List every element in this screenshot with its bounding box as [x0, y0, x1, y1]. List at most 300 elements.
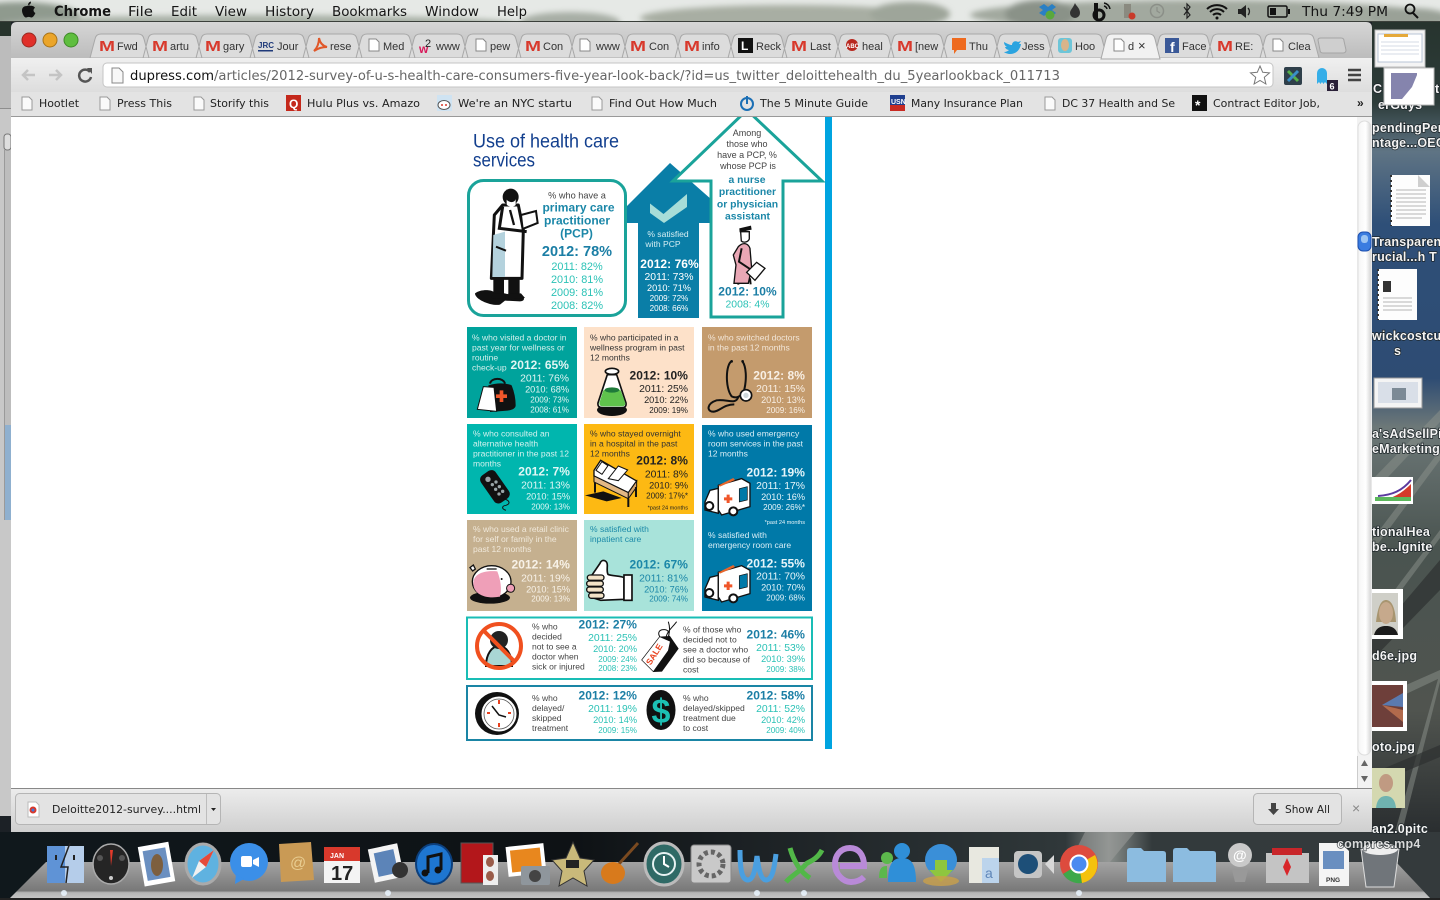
dock icons: PNG	[1326, 877, 1340, 884]
er satisfaction text: emergency room care	[708, 540, 791, 550]
stats: 2009: 19%	[649, 406, 688, 415]
tabs	[90, 34, 1319, 58]
dock icons: a	[985, 865, 993, 881]
status icons	[1039, 3, 1418, 20]
stats: *past 24 months	[648, 506, 688, 512]
card: retail clinic	[467, 520, 577, 611]
card: alternative health	[467, 424, 577, 514]
tab favicons and titles: info	[702, 41, 720, 53]
right text: cost	[683, 664, 699, 674]
bookmarks bar: Hootlet	[39, 97, 80, 110]
stats: 2012: 65%	[510, 358, 569, 372]
bookmarks bar: The 5 Minute Guide	[759, 97, 868, 110]
left stats: 2012: 27%	[578, 618, 637, 632]
stats: 2012: 67%	[630, 558, 688, 572]
left stats: 2009: 15%	[598, 726, 637, 735]
er satisfaction text	[708, 532, 791, 550]
pcp text: 2009: 81%	[551, 287, 603, 299]
title	[474, 134, 618, 166]
left stats: 2012: 12%	[578, 688, 637, 702]
tab favicons and titles: Fwd	[117, 41, 138, 53]
desktop file label over dock	[1337, 822, 1428, 851]
tab favicons and titles: Face	[1182, 41, 1206, 53]
dock icon reflections	[61, 890, 1082, 896]
menu labels: File	[128, 5, 153, 20]
left text: delayed/	[532, 703, 565, 713]
icon: nurse with clipboard	[733, 226, 765, 285]
stats: 2011: 81%	[639, 574, 688, 584]
desktop files on the right: eMarketing	[1372, 442, 1440, 456]
arrow text: 2012: 76%	[640, 257, 699, 271]
card text: routine	[472, 352, 498, 362]
bookmarks bar	[11, 92, 1372, 117]
stats: 2009: 13%	[531, 502, 570, 512]
tab favicons and titles: w	[418, 42, 429, 56]
tab favicons and titles: ABC	[846, 44, 860, 50]
tab favicons and titles: M	[897, 38, 913, 55]
bookmarks bar: Many Insurance Plan	[911, 97, 1023, 110]
tab favicons and titles: d	[1128, 41, 1134, 53]
tab favicons and titles: M	[1217, 38, 1233, 55]
card text	[472, 332, 567, 372]
tab favicons and titles: f	[1170, 39, 1175, 55]
er use text: 12 months	[708, 448, 748, 458]
er use stats: 2010: 16%	[761, 492, 805, 502]
er use text: % who used emergency	[708, 428, 800, 438]
card text: practitioner in the past 12	[473, 448, 569, 458]
tab favicons and titles: M	[684, 38, 700, 55]
left stats: 2011: 25%	[588, 633, 637, 644]
nurse text: have a PCP, %	[717, 150, 777, 160]
stats: 2010: 13%	[761, 395, 805, 405]
er use text: room services in the past	[708, 438, 804, 448]
stats: 2010: 9%	[649, 480, 688, 490]
menu labels: Window	[425, 5, 479, 20]
right text: decided not to	[683, 634, 737, 644]
menu labels: Bookmarks	[332, 5, 407, 20]
nurse text: or physician	[717, 200, 778, 210]
desktop files on the right: oto.jpg	[1372, 740, 1415, 754]
right text: did so because of	[683, 654, 751, 664]
er use stats: 2009: 26%*	[763, 503, 806, 512]
tab favicons and titles: M	[205, 38, 221, 55]
tab favicons and titles: RE:	[1235, 41, 1253, 53]
tab favicons and titles	[99, 38, 1312, 56]
icon: hospital bed	[585, 460, 637, 507]
stats: 2012: 10%	[630, 368, 688, 382]
arrow text: 2008: 66%	[650, 304, 688, 313]
stats	[518, 467, 570, 510]
tab favicons and titles: M	[152, 38, 168, 55]
right text	[683, 624, 751, 674]
left stats: 2010: 20%	[593, 644, 637, 654]
er satisfaction stats	[746, 559, 805, 600]
stats: 2009: 17%*	[646, 492, 689, 500]
tab favicons and titles: artu	[170, 41, 189, 53]
arrow panel: nurse practitioner or physician assistant	[673, 110, 822, 317]
icon: apple logo	[22, 2, 35, 18]
desktop files on the right: a'sAdSellPi	[1372, 427, 1440, 441]
scrollbar	[1357, 117, 1372, 788]
stats	[512, 558, 570, 604]
desktop files on the right: t	[1435, 82, 1440, 96]
card text: % who participated in a	[590, 332, 679, 342]
card text	[590, 430, 681, 456]
download shelf: Show All	[1285, 803, 1330, 816]
pcp text: 2012: 78%	[542, 244, 612, 260]
er use stats: 2011: 17%	[756, 481, 805, 492]
left stats	[578, 618, 637, 673]
icon: sale tag: SALE	[644, 642, 665, 667]
tab favicons and titles: Con	[543, 41, 563, 53]
stats: 2012: 8%	[753, 368, 805, 382]
window controls	[22, 33, 78, 47]
er satisfaction text: % satisfied with	[708, 530, 767, 540]
card text	[590, 334, 684, 360]
stats: 2008: 61%	[530, 406, 569, 414]
pcp text: 2011: 82%	[551, 261, 603, 273]
tab favicons and titles: gary	[223, 41, 245, 53]
card text: % who stayed overnight	[590, 428, 681, 438]
icon: doctor's bag	[477, 379, 516, 412]
icon: doctor with clipboard	[475, 189, 538, 305]
menu labels	[54, 4, 527, 20]
icon: clock	[475, 692, 519, 735]
title: Use of health care	[473, 132, 619, 152]
icon: piggy bank	[470, 565, 515, 604]
left text: sick or injured	[532, 662, 585, 672]
tab favicons and titles: Hoo	[1075, 41, 1095, 53]
card text	[473, 430, 569, 466]
dock icons: JAN	[330, 853, 344, 860]
stats: 2011: 15%	[756, 384, 805, 395]
left stats	[578, 688, 637, 735]
card text: in a hospital in the past	[590, 438, 678, 448]
desktop files on the right: tionalHea	[1372, 525, 1431, 539]
right text: to cost	[683, 723, 709, 733]
arrow text: % satisfied	[647, 229, 689, 239]
right stats: 2009: 40%	[766, 726, 805, 735]
card: switched doctors	[702, 327, 812, 418]
left stats: 2010: 14%	[593, 715, 637, 725]
clock: Thu 7:49 PM	[1301, 5, 1388, 20]
tab favicons and titles: Last	[810, 41, 831, 53]
er use stats: 2012: 19%	[746, 466, 805, 480]
tab favicons and titles: M	[630, 38, 646, 55]
dock icons	[47, 842, 1399, 887]
tab favicons and titles: rese	[330, 41, 351, 53]
arrow text: with PCP	[644, 239, 681, 249]
card text	[708, 334, 800, 352]
right stats	[746, 628, 805, 674]
icon: flask	[597, 368, 627, 416]
left stats: 2011: 19%	[588, 704, 637, 715]
extension icons and menu: 6	[1330, 82, 1335, 92]
icon: stethoscope	[709, 360, 752, 412]
card text: for self or family in the	[473, 534, 557, 544]
right stats: 2011: 53%	[756, 643, 805, 654]
pcp text: 2010: 81%	[551, 274, 603, 286]
desktop files on the right: s	[1394, 344, 1401, 358]
nurse text	[717, 128, 778, 310]
card text: alternative health	[473, 438, 538, 448]
pcp text	[542, 190, 615, 312]
title: services	[473, 150, 535, 172]
right edge blue bar	[825, 117, 832, 749]
stats: 2010: 22%	[644, 395, 688, 405]
card: wellness program	[584, 327, 694, 418]
left text	[532, 622, 585, 672]
active tab	[1101, 34, 1160, 59]
bookmarks bar: DC 37 Health and Se	[1062, 97, 1175, 110]
tab favicons and titles: 2	[425, 38, 431, 50]
desktop files on the right: d6e.jpg	[1372, 649, 1417, 663]
tab favicons and titles: ×	[1138, 38, 1146, 53]
right text: % of those who	[683, 624, 742, 634]
left text: decided	[532, 632, 562, 642]
panel: decided not to see a doctor	[467, 618, 812, 679]
navigation buttons	[23, 68, 92, 82]
card: satisfied with inpatient care	[584, 520, 694, 611]
dock icons: @	[1233, 847, 1247, 863]
new tab button	[1318, 38, 1346, 53]
arrow text: 2011: 73%	[645, 272, 693, 283]
icon: telephone	[480, 470, 510, 511]
stats: 2009: 16%	[766, 406, 805, 415]
desktop files on the right: C	[1373, 82, 1382, 96]
left text: treatment	[532, 723, 569, 733]
er use stats: *past 24 months	[765, 520, 805, 526]
nurse text: those who	[726, 139, 768, 149]
tab favicons and titles: Thu	[969, 41, 988, 53]
bookmarks bar: »	[1357, 96, 1364, 110]
card text: 12 months	[590, 352, 630, 362]
tab favicons and titles: Med	[383, 41, 404, 53]
pcp text: practitioner	[544, 214, 610, 228]
bookmarks bar: Contract Editor Job,	[1213, 97, 1320, 110]
desktop files on the right: wickcostcu	[1371, 329, 1440, 343]
stats: 2009: 13%	[531, 594, 570, 604]
stats: 2011: 76%	[520, 374, 569, 384]
bookmarks bar: Press This	[117, 97, 172, 110]
menu labels: History	[265, 5, 314, 20]
stats	[510, 358, 569, 414]
card text: past year for wellness or	[472, 342, 565, 352]
left text: skipped	[532, 713, 562, 723]
tab favicons and titles: pew	[490, 41, 510, 53]
desktop files on the right: erGuys	[1378, 98, 1422, 112]
panel: emergency room	[702, 425, 812, 611]
left text: % who	[532, 622, 558, 632]
left stats: 2008: 23%	[598, 664, 637, 673]
icon: no doctor sign	[477, 624, 521, 668]
desktop files on the right: be...Ignite	[1372, 540, 1433, 554]
stats: 2010: 15%	[526, 584, 570, 594]
er use text	[708, 430, 803, 456]
tab favicons and titles: Jess	[1022, 41, 1045, 53]
er satisfaction stats: 2011: 70%	[756, 572, 805, 582]
arrow text	[640, 229, 699, 313]
bookmarks bar: Storify this	[210, 97, 269, 110]
dock icons: 17	[331, 863, 353, 885]
nurse text: assistant	[725, 212, 771, 222]
arrow text: 2009: 72%	[650, 294, 688, 303]
card text: % satisfied with	[590, 524, 649, 534]
card text: % who used a retail clinic	[473, 524, 570, 534]
tab favicons and titles: [new	[915, 41, 938, 53]
arrow: satisfied with PCP	[627, 163, 710, 318]
stats	[630, 558, 688, 604]
icon: sale tag	[642, 622, 679, 672]
tab favicons and titles: www	[595, 41, 620, 53]
right stats: 2012: 58%	[746, 688, 805, 702]
icon: ambulance second	[705, 565, 750, 602]
pcp text: % who have a	[548, 190, 607, 200]
right stats	[746, 688, 805, 735]
bookmarks bar: We're an NYC startu	[458, 97, 572, 110]
bookmarks bar: Hulu Plus vs. Amazo	[307, 97, 420, 110]
bookmarks bar: *	[1195, 97, 1201, 113]
icon: dollar sign: $	[652, 693, 671, 731]
stats	[630, 371, 688, 413]
card text: 12 months	[590, 448, 630, 458]
panel: primary care practitioner	[468, 180, 626, 316]
menu labels: Edit	[171, 5, 197, 20]
tab favicons and titles: JRC	[258, 41, 274, 50]
stats	[754, 371, 805, 413]
er use stats	[746, 466, 806, 526]
card text: in the past 12 months	[708, 342, 790, 352]
stats: 2010: 76%	[644, 584, 688, 594]
dock	[0, 832, 1440, 900]
menu labels: View	[215, 5, 247, 20]
stats: 2012: 8%	[636, 454, 688, 468]
download shelf: ×	[1352, 800, 1360, 816]
bookmarks bar: Find Out How Much	[609, 97, 717, 110]
infographic	[467, 110, 832, 749]
right stats: 2010: 42%	[761, 715, 805, 725]
er satisfaction stats: 2009: 68%	[766, 594, 805, 602]
card text	[590, 524, 649, 544]
tab favicons and titles: Clea	[1288, 41, 1312, 53]
left text: % who	[532, 693, 558, 703]
nurse text: Among	[733, 128, 761, 138]
left text	[532, 693, 569, 733]
tab strip background	[11, 22, 1372, 58]
card text: wellness program in past	[589, 342, 685, 352]
toolbar	[11, 58, 1372, 92]
right stats: 2009: 38%	[766, 665, 805, 674]
stats: 2011: 25%	[639, 384, 688, 395]
page background	[11, 117, 1357, 788]
menu labels: Chrome	[54, 4, 111, 20]
tab favicons and titles: Jour	[277, 41, 299, 53]
tab favicons and titles: heal	[862, 41, 883, 53]
nurse text: 2012: 10%	[718, 284, 777, 298]
er satisfaction stats: 2010: 70%	[761, 582, 805, 592]
right text	[683, 693, 745, 733]
stats: 2011: 13%	[521, 480, 570, 492]
left stats: 2009: 24%	[598, 655, 637, 664]
desktop files on the right	[1371, 30, 1440, 808]
stats: 2012: 14%	[512, 558, 570, 572]
tab favicons and titles: M	[525, 38, 541, 55]
bookmarks bar: USN	[891, 99, 906, 106]
download shelf: Deloitte2012-survey....html	[52, 803, 201, 816]
stats: 2009: 74%	[649, 594, 688, 604]
icon: check mark	[650, 194, 687, 223]
panel: delayed treatment	[467, 686, 812, 740]
card text: % who visited a doctor in	[472, 332, 567, 342]
arrow text: 2010: 71%	[647, 283, 691, 293]
card text: months	[473, 458, 501, 468]
stats: 2010: 15%	[526, 492, 570, 502]
mac menu bar	[0, 0, 1440, 22]
right text: delayed/skipped	[683, 703, 745, 713]
icon: ambulance	[705, 478, 750, 515]
right stats: 2012: 46%	[746, 628, 805, 642]
right text: % who	[683, 693, 709, 703]
stats: 2011: 19%	[521, 574, 570, 584]
icon: thumbs up	[587, 560, 632, 600]
tab favicons and titles: Reck	[756, 41, 782, 53]
card text: past 12 months	[473, 544, 531, 554]
left text: doctor when	[532, 652, 579, 662]
stats: 2010: 68%	[525, 384, 569, 394]
card: wellness visit	[467, 327, 577, 418]
right text: treatment due	[683, 713, 736, 723]
card text: % who switched doctors	[708, 332, 800, 342]
stats: 2012: 7%	[518, 464, 570, 478]
tab favicons and titles: www	[435, 41, 460, 53]
card text: check-up	[472, 362, 507, 372]
dock icons: @	[290, 855, 306, 872]
right text: see a doctor who	[683, 644, 748, 654]
tab favicons and titles: M	[791, 38, 807, 55]
card text: inpatient care	[590, 534, 642, 544]
card: overnight hospital stay	[584, 424, 694, 514]
stats: 2009: 73%	[530, 396, 569, 404]
right stats: 2011: 52%	[756, 704, 805, 715]
nurse text: 2008: 4%	[726, 300, 769, 310]
download shelf	[11, 788, 1372, 832]
pcp text: primary care	[542, 200, 615, 214]
address bar: dupress.com/articles/2012-survey-of-u-s-health-care-consumers-five-year-look-back/?id=us_twitter_deloittehealth_du_5yearlookback_011713	[130, 69, 1060, 84]
desktop files on the right: Transparen	[1372, 235, 1440, 249]
desktop file label over dock: an2.0pitc	[1372, 822, 1428, 836]
stats	[636, 454, 689, 512]
pcp text: (PCP)	[560, 226, 593, 240]
tab favicons and titles: Con	[649, 41, 669, 53]
extension icons and menu	[1284, 67, 1361, 92]
nurse text: a nurse	[729, 175, 766, 186]
menu labels: Help	[497, 5, 527, 20]
address bar	[103, 63, 1273, 87]
nurse text: practitioner	[719, 187, 776, 198]
tab favicons and titles: L	[741, 39, 748, 53]
card text	[473, 524, 570, 554]
desktop files on the right: rucial...h T	[1372, 250, 1437, 264]
nurse text: whose PCP is	[719, 161, 776, 171]
icon: dollar sign	[646, 690, 676, 731]
right stats: 2010: 39%	[761, 654, 805, 664]
bookmarks bar: Q	[289, 97, 298, 111]
er satisfaction stats: 2012: 55%	[746, 556, 805, 570]
tab favicons and titles: M	[99, 38, 115, 55]
pcp text: 2008: 82%	[551, 300, 603, 312]
card text: % who consulted an	[473, 428, 550, 438]
stats: 2011: 8%	[645, 470, 688, 480]
